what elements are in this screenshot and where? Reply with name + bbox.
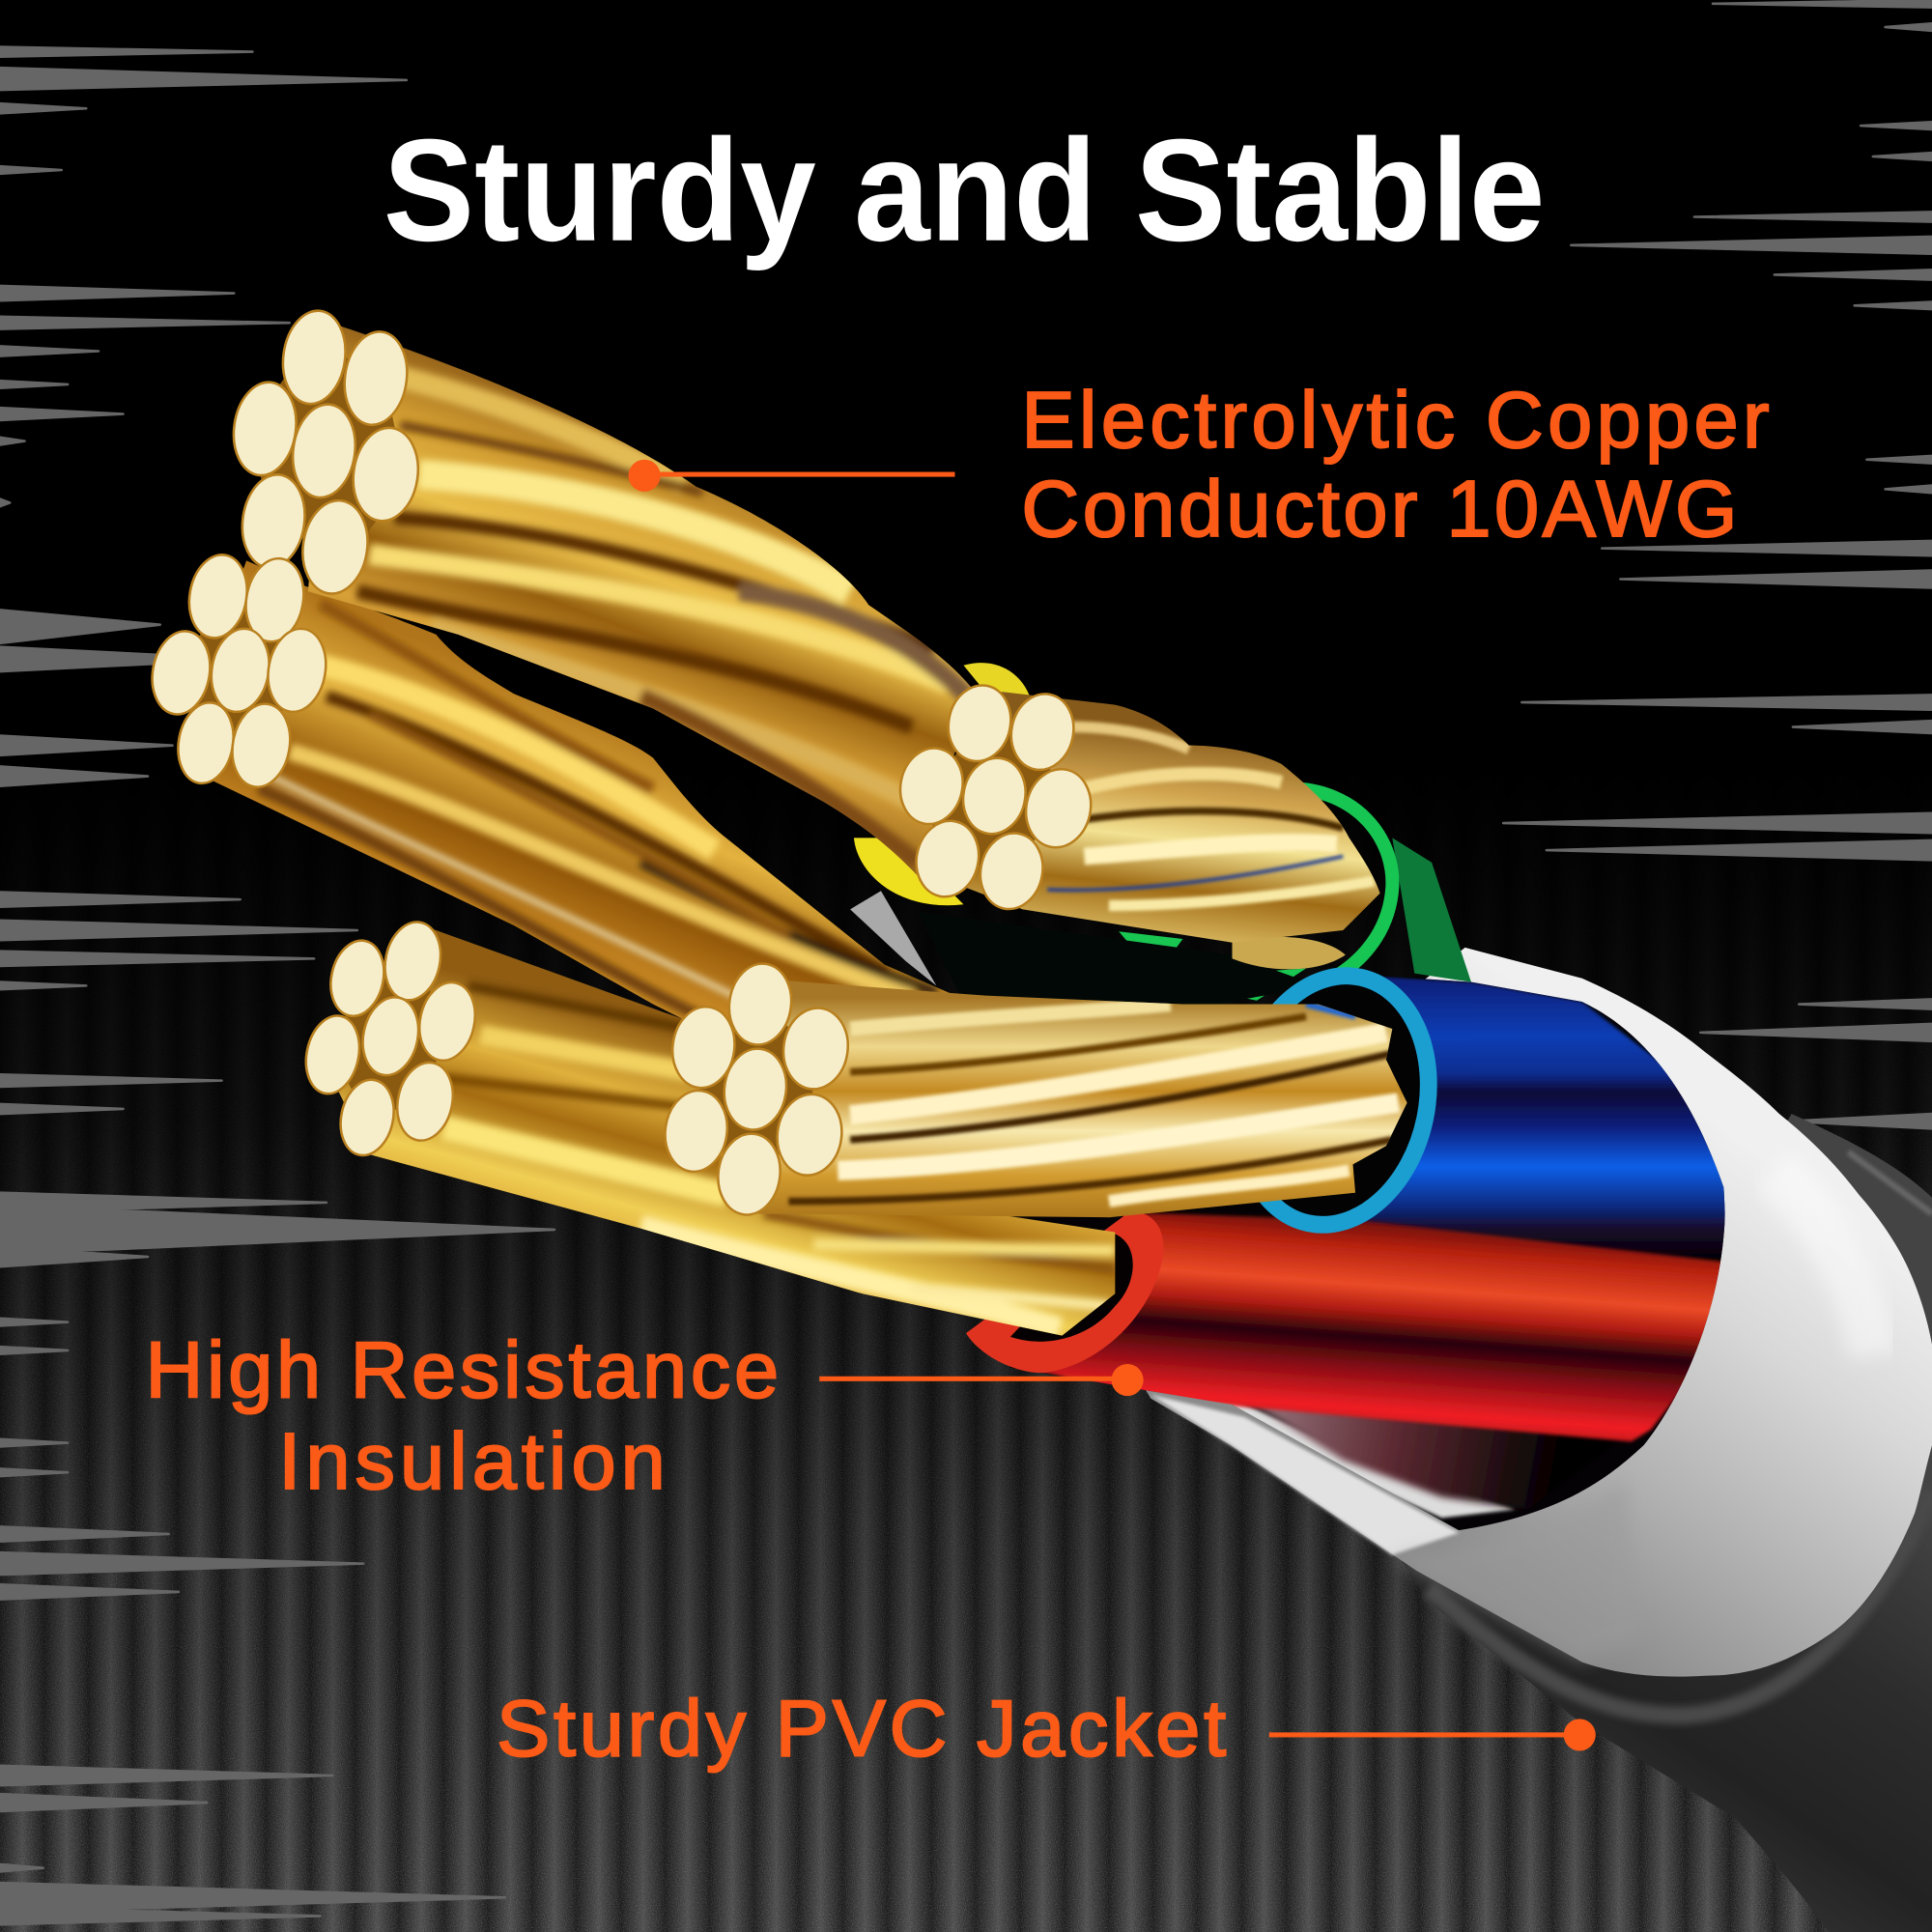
sleeve opening interior: [1010, 976, 1725, 1530]
green core ring: [1289, 788, 1392, 976]
label: High Resistance: [146, 1324, 779, 1414]
label: Sturdy PVC Jacket: [497, 1684, 1226, 1774]
background: left grey streaks: [0, 46, 554, 1924]
ring face: [966, 1212, 1163, 1373]
leader line: [1269, 1732, 1579, 1737]
inner white wrap: [1152, 1392, 1516, 1518]
sleeve highlight: [1775, 1171, 1873, 1355]
strand ends: lower left bundle: [299, 917, 482, 1160]
end backing: [185, 591, 301, 746]
background: vertical stripes: [0, 957, 1932, 1932]
callout: copper conductor: [629, 375, 1770, 554]
strand body: [185, 560, 961, 1047]
copper strand bundle: lower left: [323, 924, 1115, 1336]
strand body: [690, 980, 1407, 1217]
blue core ring: [1218, 958, 1451, 1242]
end backing: [332, 961, 447, 1118]
leader line: [819, 1377, 1127, 1381]
blue core body: [1364, 976, 1725, 1269]
strand ends: far left bundle: [146, 551, 332, 791]
strand body: [308, 323, 974, 876]
end backing: [246, 345, 407, 554]
cable: [850, 663, 1932, 1932]
black PVC jacket: [1380, 1114, 1932, 1932]
strand highlights: [1047, 727, 1374, 906]
copper strand bundle: far left: [213, 560, 950, 1020]
background: film grain: [0, 1054, 1932, 1932]
strand body: [949, 690, 1380, 943]
white sleeve: [1109, 948, 1932, 1677]
strand ends: top bundle: [228, 306, 424, 598]
leader dot: [1112, 1364, 1144, 1396]
title: Sturdy and Stable: [384, 109, 1545, 271]
leader dot: [629, 460, 661, 492]
jacket upper edge highlight: [1848, 1152, 1932, 1213]
leader line: [653, 472, 955, 477]
yellow core top: [963, 663, 1030, 697]
strand body: [323, 924, 1115, 1336]
strand ends: center bundle: [660, 959, 853, 1219]
green core body: [1392, 838, 1471, 982]
label: Electrolytic Copper: [1021, 375, 1770, 465]
copper strand bundle: center: [690, 980, 1407, 1217]
strand highlights: [246, 604, 936, 1029]
green core fragments: [1119, 931, 1306, 1001]
end backing: [696, 1005, 815, 1175]
callout: insulation: [146, 1324, 1144, 1506]
lower back strands: [1233, 937, 1346, 969]
white core fragment: [850, 891, 936, 985]
opening shadow: [1010, 979, 1725, 1530]
lower dark core: [1254, 1406, 1539, 1511]
sleeve lower left white area: [1151, 1395, 1459, 1555]
red core ring: [966, 1212, 1163, 1373]
strand highlights: [357, 376, 967, 863]
red core body: [1035, 1212, 1725, 1441]
leader dot: [1564, 1719, 1596, 1750]
dark core gap: [918, 912, 1319, 1010]
ring hole: [1010, 1233, 1133, 1342]
sleeve lower shade: [1392, 1479, 1638, 1662]
label line 2: Conductor 10AWG: [1021, 464, 1737, 554]
strand ends: upper right bundle: [894, 679, 1098, 915]
jacket ring band: [1428, 1491, 1932, 1716]
yellow core ring: [854, 838, 963, 905]
callout: PVC jacket: [497, 1684, 1596, 1774]
strand highlights: [788, 1005, 1399, 1202]
copper strand bundle: top: [308, 323, 974, 876]
copper strand bundle: upper right: [949, 690, 1380, 943]
label line 2: Insulation: [278, 1416, 666, 1506]
end backing: [931, 724, 1059, 871]
background: right grey streaks: [1503, 0, 1932, 1128]
strand highlights: [443, 985, 1115, 1328]
